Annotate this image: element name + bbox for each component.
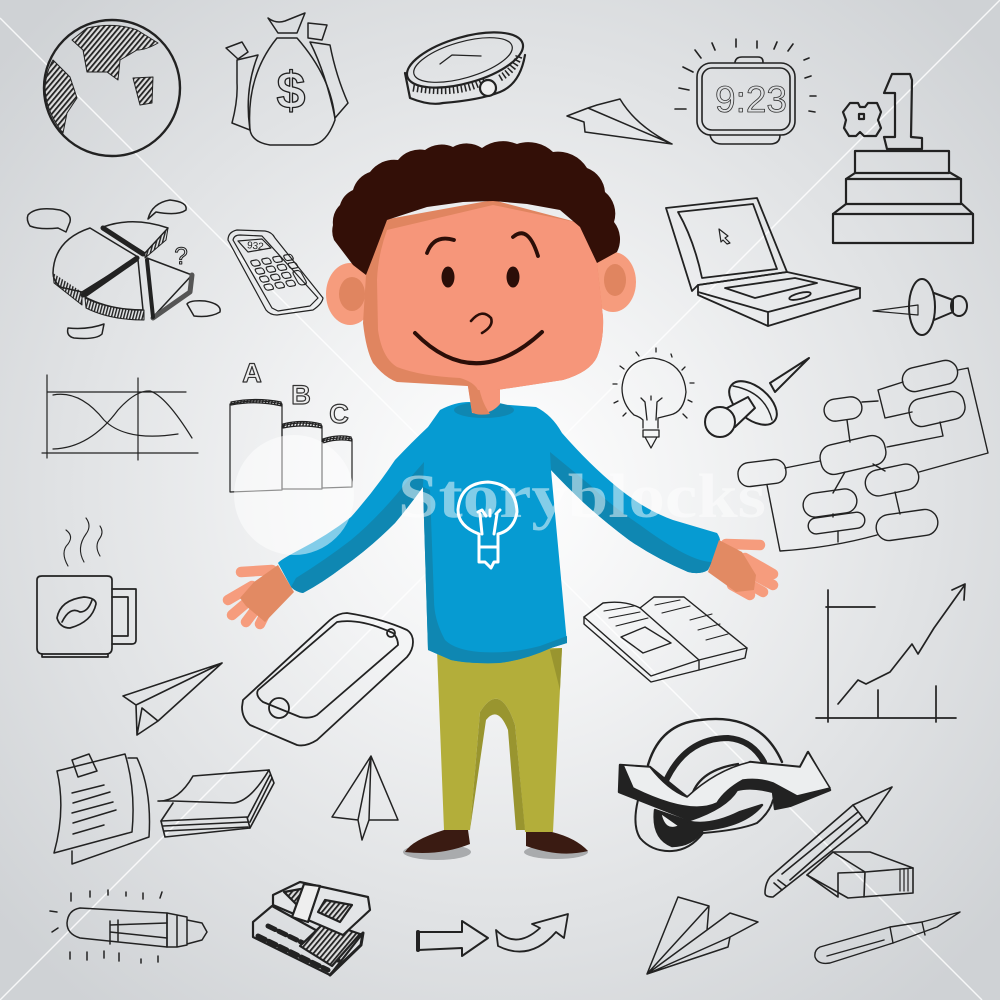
icon: paper plane centre (332, 756, 398, 840)
trousers (437, 648, 562, 832)
face (415, 233, 542, 363)
icon: small arrow left (418, 921, 488, 956)
bar chart: A B C: C (329, 399, 349, 429)
character: boy (228, 141, 773, 860)
icon: laptop (666, 198, 860, 326)
icon: pushpin diagonal (705, 358, 809, 437)
icon: paper plane left (123, 663, 222, 735)
watermark: Storyblocks (398, 463, 766, 531)
bar chart: A B C: B (291, 380, 311, 410)
icon: open book (584, 597, 747, 682)
icon: calculator (228, 230, 323, 315)
torso and arms (278, 402, 720, 663)
chart: rising arrow graph (816, 584, 965, 722)
icon: smartphone (242, 613, 413, 745)
icon: digital clock: 9:23 (715, 79, 787, 120)
watermark (234, 435, 766, 555)
neck (467, 380, 500, 415)
icon: paper plane top (567, 99, 672, 144)
icon: coin watch (401, 21, 529, 104)
icon: calculator: 932 (246, 240, 265, 253)
icon: small arrow right (496, 914, 568, 952)
icon: fountain pen (815, 912, 960, 963)
icon: pie chart (27, 200, 220, 338)
icon: paper plane bottom (647, 897, 758, 974)
icon: stacked paper (158, 770, 274, 837)
chart: line graph (42, 375, 198, 460)
icon: digital clock (675, 39, 816, 144)
icon: money bags: $ (277, 62, 306, 120)
icon: cash stacks (253, 882, 370, 975)
icon: bulb on shirt (458, 482, 517, 568)
icon: money bags (226, 13, 348, 145)
shoes and shadow (403, 830, 588, 860)
hands (228, 540, 773, 624)
icon: pushpin right (873, 279, 967, 335)
icon: pie chart: ? (174, 243, 188, 270)
hair (332, 141, 620, 275)
head (363, 200, 603, 390)
bar chart: A B C: A (242, 358, 262, 388)
icon: globe (44, 20, 180, 156)
icon: podium number one (833, 74, 973, 243)
icon: lightbulb (613, 348, 694, 448)
ears (326, 252, 636, 325)
bar chart: A B C (230, 358, 352, 492)
chart: flowchart (737, 358, 988, 551)
icon: knot arrow (619, 719, 830, 851)
icon: tube bulb (50, 890, 207, 963)
icon: pencil (765, 787, 892, 897)
icon: notes (54, 754, 150, 864)
icon: eraser (807, 852, 913, 898)
icon: coffee mug (37, 518, 136, 657)
